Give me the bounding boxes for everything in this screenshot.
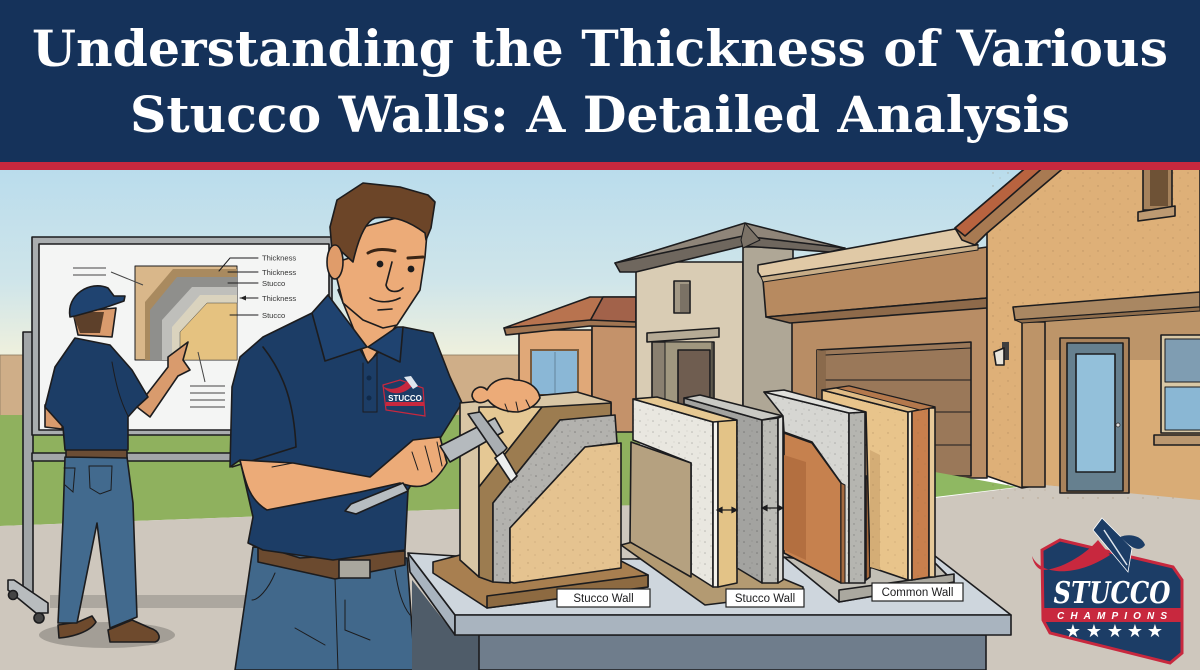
jeans	[58, 457, 137, 628]
logo stars: ★	[1086, 621, 1102, 642]
polo logo	[382, 376, 425, 416]
logo stars: ★	[1147, 621, 1163, 642]
board frame	[32, 237, 332, 435]
cap	[70, 286, 125, 317]
background: concrete ground	[0, 484, 1200, 670]
header band	[0, 0, 1200, 162]
section diagram	[135, 266, 237, 360]
ear	[327, 245, 343, 279]
main worker	[230, 183, 462, 670]
diagram callouts: Thickness	[262, 268, 296, 277]
wall lantern	[994, 342, 1009, 365]
placket	[363, 355, 377, 412]
logo tagline: CHAMPIONS	[1057, 611, 1167, 622]
navy polo	[230, 295, 462, 560]
thickness arrows	[717, 506, 783, 512]
boots	[58, 616, 159, 642]
header red rule	[0, 162, 1200, 170]
wall sample four: terracotta core	[764, 390, 954, 602]
belt and buckle	[258, 545, 405, 579]
whiteboard on stand	[8, 237, 332, 623]
head	[73, 308, 116, 337]
board text lines and leaders	[73, 268, 225, 407]
sample labels	[557, 583, 963, 607]
logo stars	[1065, 621, 1163, 642]
title: Understanding the Thickness of Various	[32, 19, 1168, 78]
nose and mouth	[370, 262, 403, 310]
logo stars: ★	[1107, 621, 1123, 642]
holding hand on sample	[472, 378, 540, 412]
sample labels: Stucco Wall	[735, 593, 795, 605]
board surface	[39, 244, 329, 430]
face	[333, 217, 427, 328]
pockets	[64, 466, 112, 494]
red swoosh	[1032, 540, 1110, 571]
trowel	[1093, 518, 1145, 572]
hair	[330, 183, 435, 262]
main house	[955, 165, 1200, 500]
display table	[408, 553, 1011, 670]
stand legs and crossbar	[8, 332, 242, 623]
trousers	[235, 547, 415, 670]
caliper and second hand	[345, 378, 540, 514]
logo wordmark: STUCCO	[1054, 576, 1170, 611]
beige tower house	[615, 223, 845, 422]
front door	[1060, 338, 1129, 493]
right lawn patch	[935, 472, 1018, 497]
diagram callouts: Stucco	[262, 311, 285, 320]
vent and sill	[1138, 165, 1175, 221]
neck	[338, 280, 400, 365]
porch	[1013, 292, 1200, 500]
sample labels: Stucco Wall	[573, 593, 634, 605]
garage wing	[758, 229, 987, 478]
wall sample two: white render	[621, 397, 803, 605]
sample labels: Common Wall	[882, 587, 953, 599]
diagram callouts: Thickness	[262, 254, 296, 262]
wall sample one: layered stucco	[433, 392, 648, 608]
title: Stucco Walls: A Detailed Analysis	[130, 85, 1070, 144]
red band	[1043, 608, 1182, 622]
brand logo badge	[1032, 518, 1182, 663]
background: ground shadow	[50, 595, 250, 608]
left arm	[45, 405, 64, 429]
wall sample five: tan and terracotta	[822, 386, 935, 580]
background: far boundary wall	[0, 355, 520, 417]
navy polo back	[45, 338, 148, 450]
forearm and hand	[240, 437, 447, 510]
title	[32, 19, 1168, 144]
eyes and brows	[368, 249, 423, 272]
caliper beam	[345, 483, 408, 514]
window	[1154, 335, 1200, 445]
collar	[312, 295, 403, 362]
wall sample three: grey render	[684, 395, 783, 583]
left house	[504, 297, 638, 432]
pointing arm	[137, 342, 190, 417]
belt	[66, 449, 127, 458]
background: lawn	[0, 415, 640, 526]
diagram callouts: Thickness	[262, 294, 296, 303]
shadow	[39, 622, 175, 648]
logo stars: ★	[1065, 621, 1081, 642]
diagram callouts: Stucco	[262, 279, 285, 288]
diagram callouts	[219, 254, 296, 320]
polo logo: STUCCO	[388, 394, 422, 403]
background: sky	[0, 165, 1200, 360]
logo stars: ★	[1127, 621, 1143, 642]
sleeve seam	[232, 347, 296, 467]
worker at whiteboard	[39, 286, 190, 648]
